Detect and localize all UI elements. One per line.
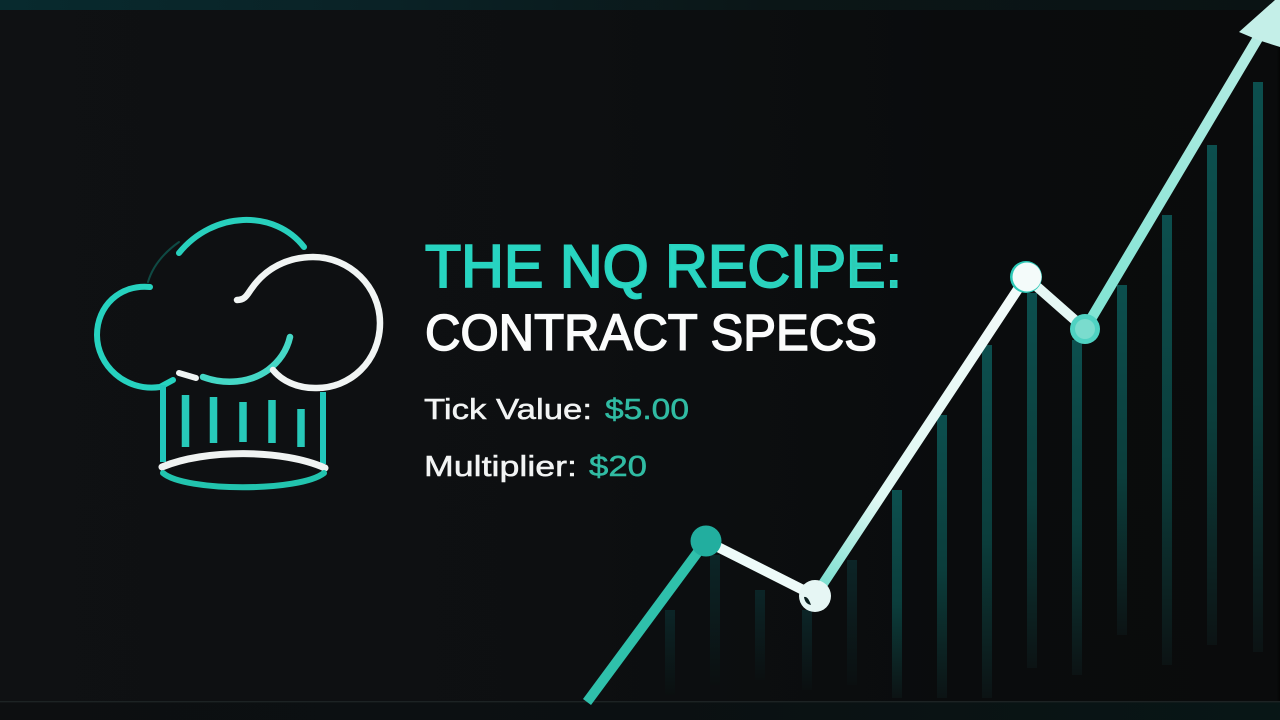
hat: white brim [162,454,325,468]
hat: right white puff [237,257,380,388]
title [425,233,902,361]
segment: first dip [706,541,815,596]
spec: multiplier [424,451,647,483]
hat: left puff [97,287,173,388]
background bars [665,82,1263,698]
hat: lower teal arc [203,337,290,382]
segment: final rise [1085,38,1258,329]
hat: faint arc [148,242,179,282]
spec: multiplier: Multiplier: [424,451,577,483]
line chart with arrow [587,0,1280,702]
hat: top puff arc [179,220,304,253]
point 2 [799,580,831,612]
hat: band stripes [186,395,301,447]
hat: band sides [163,385,323,464]
icon: chef hat [97,220,380,487]
segment: rise from baseline [587,541,706,702]
point 4 [1070,314,1100,344]
segment: main rise [815,277,1026,596]
arrowhead [1239,0,1280,47]
point 1 [690,526,722,556]
segment: second dip [1026,277,1085,329]
spec: tick value: $5.00 [605,394,689,426]
spec: tick value: Tick Value: [424,394,592,426]
title line 2: CONTRACT SPECS [425,304,877,361]
point 3 [1010,261,1042,293]
hat: small white stroke [179,373,196,378]
title line 1: THE NQ RECIPE: [425,233,902,300]
spec: multiplier: $20 [589,451,647,483]
hat: teal base [163,473,324,487]
spec: tick value [424,394,689,426]
